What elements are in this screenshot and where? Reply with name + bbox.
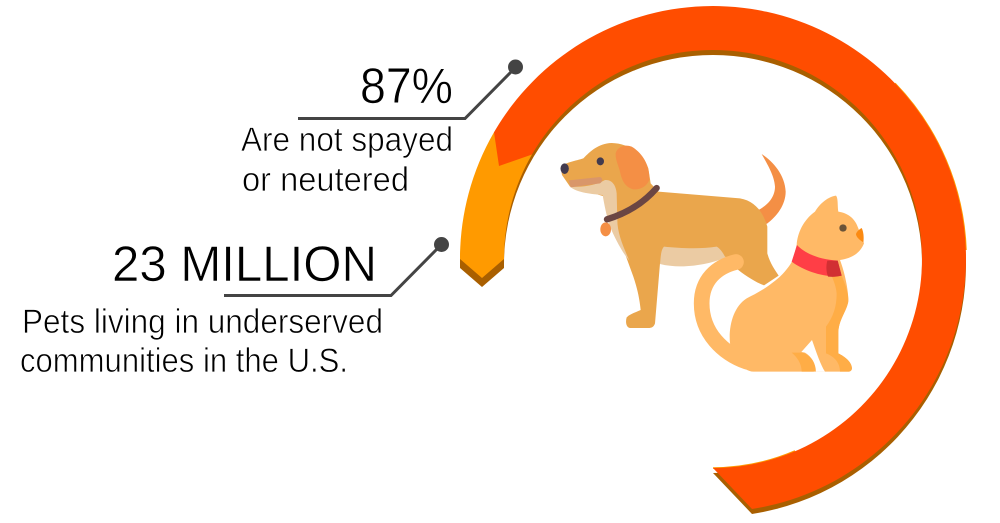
ring orange rim: [713, 83, 966, 468]
cat nose: [856, 228, 864, 242]
ring shadow edge: [460, 11, 966, 514]
illustration: dog and cat: [560, 143, 864, 372]
leader line: [298, 70, 513, 118]
callout: 87%: [241, 58, 523, 199]
cat body and head: [730, 196, 864, 372]
dog nose: [560, 163, 569, 174]
ring orange underlay: [460, 110, 532, 278]
cat eye: [839, 224, 847, 232]
leader dot: [434, 237, 449, 252]
dog tag: [600, 222, 611, 236]
dog body: [561, 143, 779, 328]
ring gauge: [460, 6, 966, 514]
dog belly: [660, 247, 725, 266]
dog mouth: [569, 177, 602, 187]
leader line: [224, 247, 439, 296]
callout: 23 million: [20, 236, 449, 380]
leader dot: [508, 60, 523, 74]
cat collar: [792, 245, 842, 276]
cat: [702, 196, 864, 372]
dog: [560, 143, 786, 328]
description: Are not spayed: [241, 121, 453, 159]
dog collar: [607, 188, 657, 219]
dog ear: [616, 146, 649, 189]
ring red segment: [494, 6, 966, 509]
description: [20, 303, 383, 380]
cat leg gap: [801, 340, 825, 372]
dog chest: [569, 180, 629, 261]
description: [241, 121, 453, 199]
cat collar shade: [826, 261, 842, 277]
dog tail: [758, 154, 786, 224]
description: or neutered: [242, 161, 409, 199]
cat side shade: [826, 276, 852, 372]
cat hind paw shade: [792, 353, 816, 372]
dog eye: [597, 157, 604, 165]
statistic: 23 MILLION: [112, 236, 377, 292]
description: communities in the U.S.: [20, 342, 348, 380]
statistic: 87%: [360, 58, 453, 114]
description: Pets living in underserved: [22, 303, 383, 341]
cat tail: [702, 262, 747, 362]
